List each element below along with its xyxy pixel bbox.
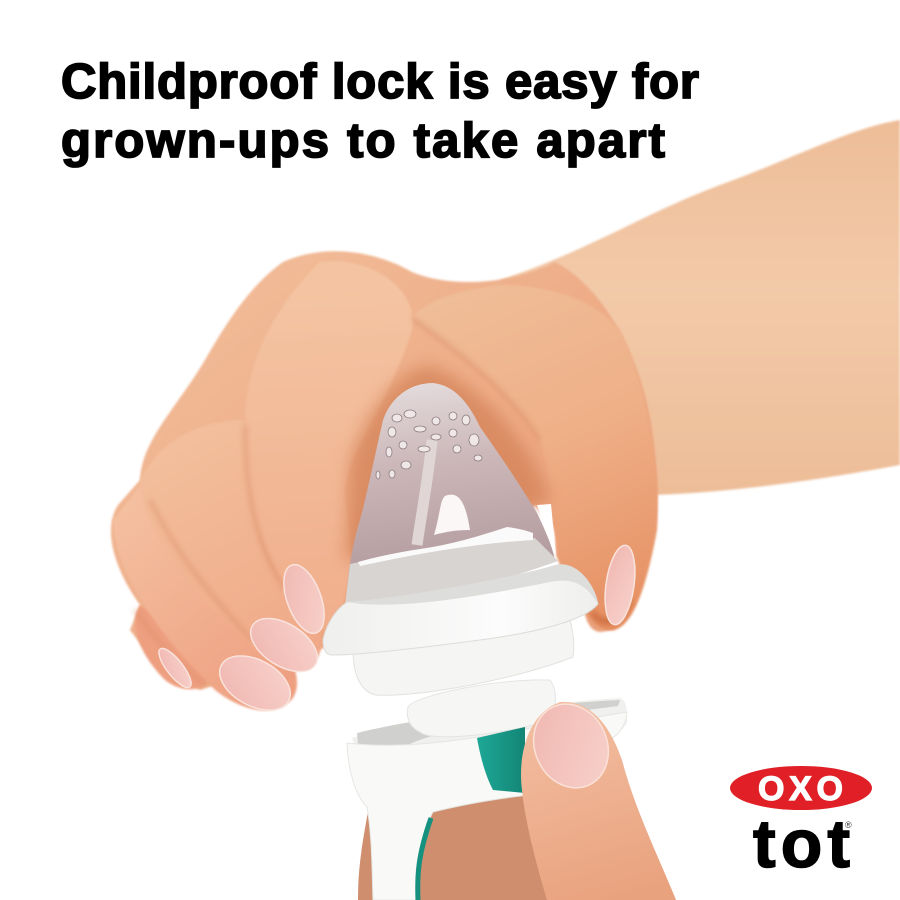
collar top rim [347,565,598,605]
lower hub of upper collar [353,620,574,695]
crease: fingers [135,318,540,685]
ring finger [113,485,297,710]
white collar ring [323,565,598,655]
teal stem accent [418,818,431,900]
lower thumb [520,692,676,900]
inner stem [417,440,432,545]
shading on palm [345,365,550,560]
teat holes [376,410,482,479]
red oval [730,766,872,810]
registered mark: ® [845,820,852,830]
logo: OXO tot [730,766,872,882]
upper hand [111,251,658,721]
silicone nipple [345,383,558,606]
thumb nail [520,692,622,800]
OXO wordmark: OXO [758,770,843,808]
lower bottle base with lock [347,680,627,900]
nails [154,543,639,721]
title: grown-ups to take apart [61,114,665,168]
fingers behind handle [358,790,560,900]
pinky finger [135,605,207,689]
tot wordmark: tot [753,806,850,882]
hand back and palm [111,251,658,690]
inner tab [434,495,470,535]
inner white line [358,527,533,566]
shading under thumb [592,600,630,622]
white gap beside nipple [537,504,556,556]
collar band [345,538,558,606]
base inner hollow [357,700,620,745]
base body [347,712,627,900]
lock post [407,680,555,737]
base back rim [352,698,627,762]
thumb [412,285,658,630]
arm [500,120,900,495]
teal lock button [477,727,525,793]
title [61,55,699,168]
middle finger [140,420,321,670]
index finger [245,261,413,629]
title: Childproof lock is easy for [61,55,699,109]
